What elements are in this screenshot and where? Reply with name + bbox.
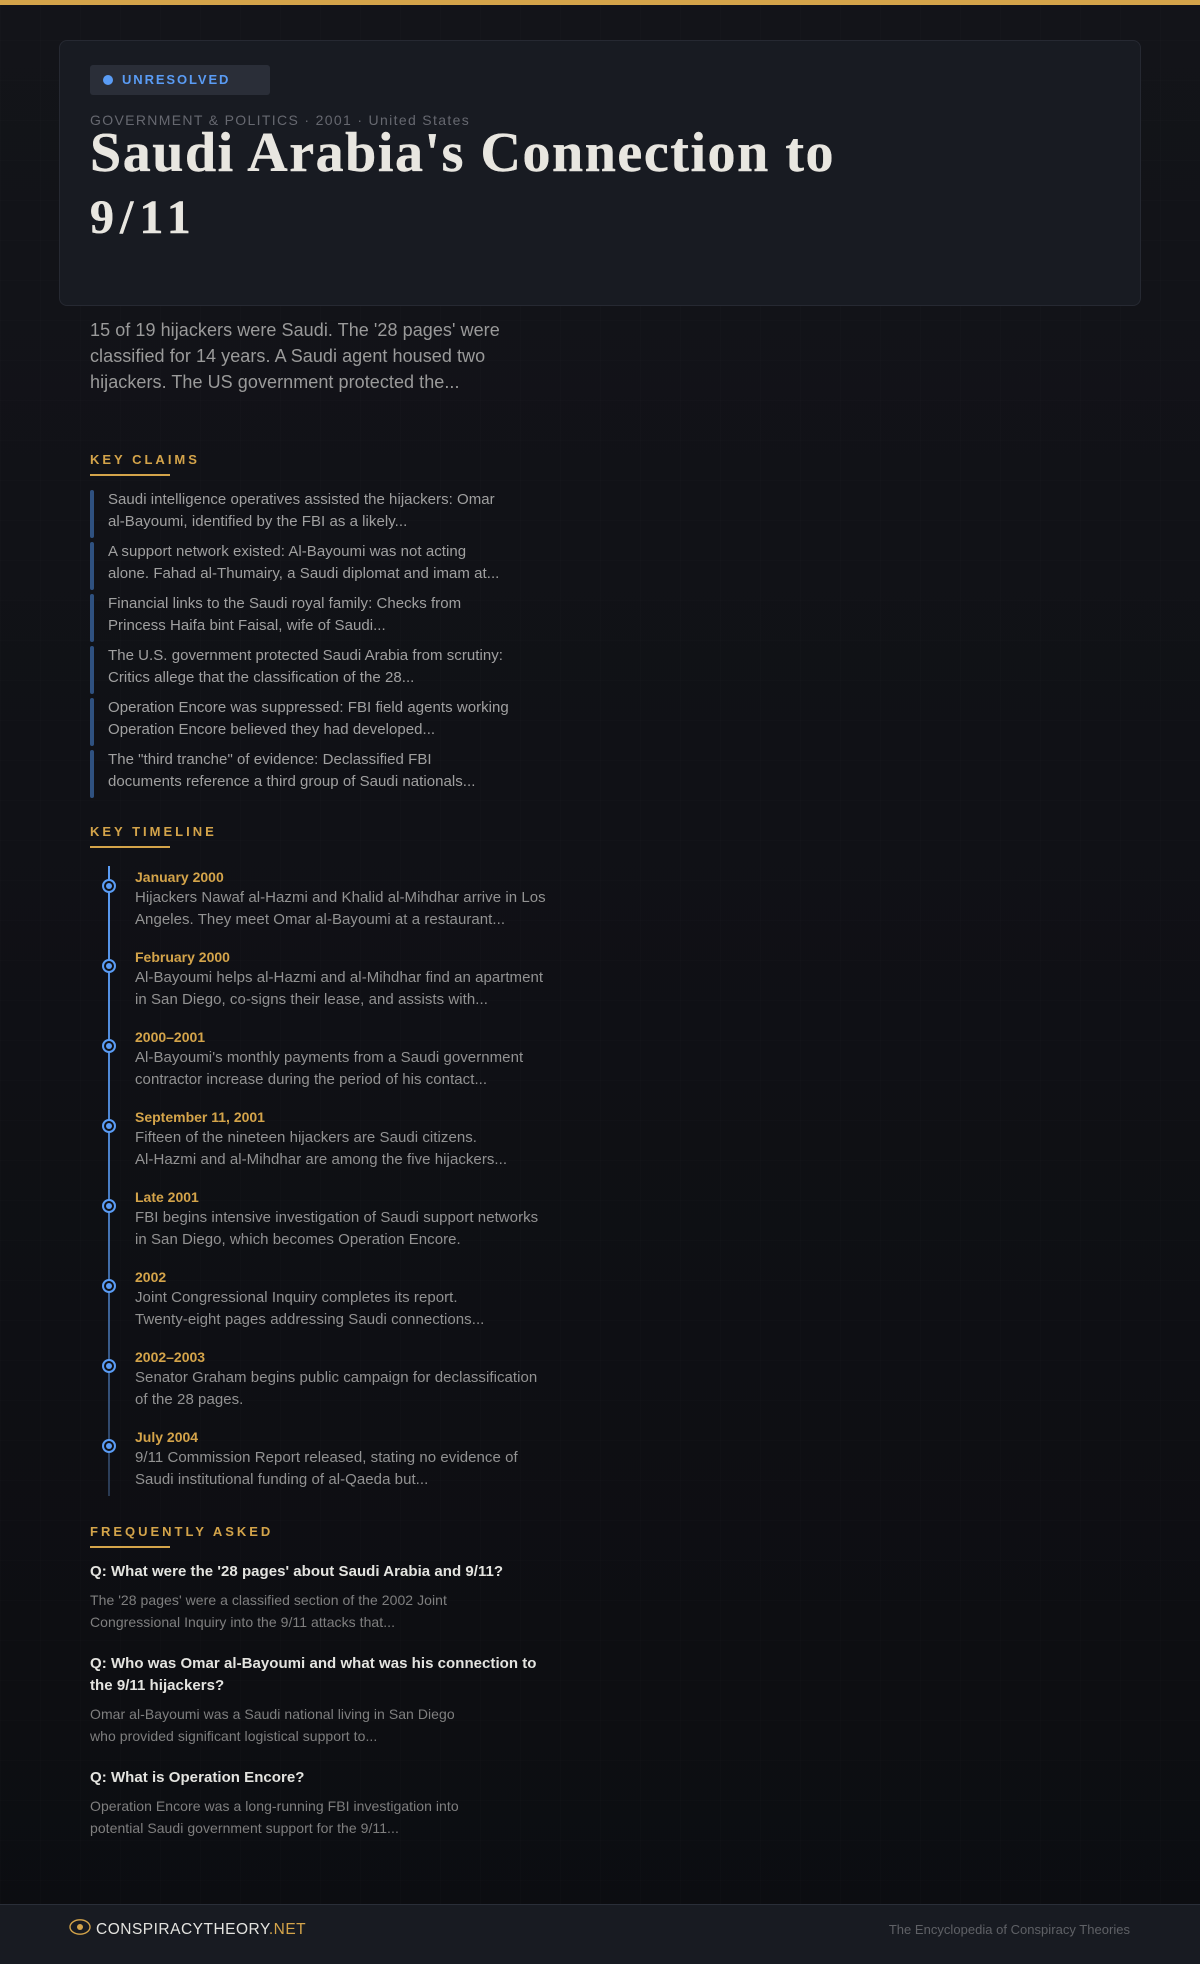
event: Late 2001	[102, 1189, 538, 1248]
answer 3: potential Saudi government support for the 9/11...	[90, 1820, 399, 1836]
summary: 15 of 19 hijackers were Saudi. The '28 pages' were	[90, 320, 500, 340]
event: July 2004: July 2004	[135, 1429, 198, 1445]
event: July 2004: 9/11 Commission Report released, stating no evidence of	[135, 1449, 518, 1466]
event: February 2000: February 2000	[135, 949, 230, 965]
answer 1: Congressional Inquiry into the 9/11 attacks that...	[90, 1614, 395, 1630]
event: 2000–2001: contractor increase during the period of his contact...	[135, 1071, 487, 1088]
panel: key claims list	[90, 490, 509, 798]
event: 2002	[102, 1269, 484, 1328]
answer 3: Operation Encore was a long-running FBI investigation into	[90, 1798, 459, 1814]
event: January 2000	[102, 869, 546, 928]
heading: frequently asked: FREQUENTLY ASKED	[90, 1524, 273, 1539]
tagline: The Encyclopedia of Conspiracy Theories	[889, 1922, 1130, 1937]
question 2	[90, 1655, 537, 1694]
event: 2002: Twenty-eight pages addressing Saudi connections...	[135, 1311, 484, 1328]
status badge	[90, 65, 270, 95]
event: July 2004	[102, 1429, 518, 1488]
top accent bar	[0, 0, 1200, 5]
event: February 2000: in San Diego, co-signs their lease, and assists with...	[135, 991, 488, 1008]
summary: hijackers. The US government protected the...	[90, 372, 460, 392]
question 2: Q: Who was Omar al-Bayoumi and what was his connection to	[90, 1655, 537, 1672]
title	[90, 122, 835, 244]
event: 2000–2001: 2000–2001	[135, 1029, 205, 1045]
event: 2002–2003	[102, 1349, 537, 1408]
title: Saudi Arabia's Connection to	[90, 122, 835, 184]
answer 1	[90, 1592, 447, 1630]
event: 2002: Joint Congressional Inquiry completes its report.	[135, 1289, 458, 1306]
event: 2002–2003: of the 28 pages.	[135, 1391, 243, 1408]
badge label: UNRESOLVED	[122, 72, 230, 87]
event: Late 2001: Late 2001	[135, 1189, 199, 1205]
answer 3	[90, 1798, 459, 1836]
claim 6: documents reference a third group of Saudi nationals...	[108, 773, 475, 790]
claim 4: The U.S. government protected Saudi Arabia from scrutiny:	[108, 647, 503, 664]
event: 2000–2001: Al-Bayoumi's monthly payments from a Saudi government	[135, 1049, 523, 1066]
answer 1: The '28 pages' were a classified section of the 2002 Joint	[90, 1592, 447, 1608]
summary	[90, 320, 500, 392]
event: July 2004: Saudi institutional funding of al-Qaeda but...	[135, 1471, 428, 1488]
brand wordmark: CONSPIRACYTHEORY.NET	[96, 1921, 306, 1938]
claim 1: Saudi intelligence operatives assisted the hijackers: Omar	[108, 491, 495, 508]
panel: timeline	[102, 869, 546, 1488]
claim 4: Critics allege that the classification of the 28...	[108, 669, 414, 686]
answer 2: who provided significant logistical support to...	[90, 1728, 377, 1744]
event: February 2000	[102, 949, 543, 1008]
event: 2002–2003: Senator Graham begins public campaign for declassification	[135, 1369, 537, 1386]
event: January 2000: January 2000	[135, 869, 224, 885]
event: September 11, 2001: Al-Hazmi and al-Mihdhar are among the five hijackers...	[135, 1151, 507, 1168]
event: January 2000: Hijackers Nawaf al-Hazmi and Khalid al-Mihdhar arrive in Los	[135, 889, 546, 906]
event: 2002: 2002	[135, 1269, 166, 1285]
footer	[0, 1904, 1200, 1964]
summary: classified for 14 years. A Saudi agent housed two	[90, 346, 485, 366]
panel: FAQ	[90, 1563, 537, 1836]
question 1: Q: What were the '28 pages' about Saudi Arabia and 9/11?	[90, 1563, 503, 1580]
claim 5: Operation Encore was suppressed: FBI field agents working	[108, 699, 509, 716]
answer 2: Omar al-Bayoumi was a Saudi national living in San Diego	[90, 1706, 455, 1722]
category metadata: GOVERNMENT & POLITICS · 2001 · United States	[90, 112, 470, 128]
event: September 11, 2001	[102, 1109, 507, 1168]
claim 2: alone. Fahad al-Thumairy, a Saudi diplomat and imam at...	[108, 565, 499, 582]
heading: key claims: KEY CLAIMS	[90, 452, 200, 467]
event: January 2000: Angeles. They meet Omar al-Bayoumi at a restaurant...	[135, 911, 505, 928]
claim 4	[90, 646, 503, 694]
event: Late 2001: in San Diego, which becomes Operation Encore.	[135, 1231, 461, 1248]
question 3: Q: What is Operation Encore?	[90, 1769, 304, 1786]
answer 2	[90, 1706, 455, 1744]
claim 6	[90, 750, 475, 798]
claim 3	[90, 594, 461, 642]
timeline axis	[108, 866, 110, 1496]
claim 1: al-Bayoumi, identified by the FBI as a likely...	[108, 513, 407, 530]
claim 2	[90, 542, 499, 590]
heading: key timeline: KEY TIMELINE	[90, 824, 217, 839]
event: February 2000: Al-Bayoumi helps al-Hazmi and al-Mihdhar find an apartment	[135, 969, 543, 986]
claim 1	[90, 490, 495, 538]
claim 6: The "third tranche" of evidence: Declassified FBI	[108, 751, 432, 768]
event: September 11, 2001: September 11, 2001	[135, 1109, 265, 1125]
event: Late 2001: FBI begins intensive investigation of Saudi support networks	[135, 1209, 538, 1226]
icon: eye logo	[69, 1919, 91, 1935]
claim 5	[90, 698, 509, 746]
claim 3: Princess Haifa bint Faisal, wife of Saudi...	[108, 617, 386, 634]
title: 9/11	[90, 191, 197, 244]
event: 2002–2003: 2002–2003	[135, 1349, 205, 1365]
event: 2000–2001	[102, 1029, 524, 1088]
claim 2: A support network existed: Al-Bayoumi was not acting	[108, 543, 466, 560]
panel: hero header	[59, 40, 1141, 306]
question 2: the 9/11 hijackers?	[90, 1677, 224, 1694]
event: September 11, 2001: Fifteen of the nineteen hijackers are Saudi citizens.	[135, 1129, 477, 1146]
claim 5: Operation Encore believed they had developed...	[108, 721, 435, 738]
icon: status dot	[103, 75, 113, 85]
claim 3: Financial links to the Saudi royal family: Checks from	[108, 595, 461, 612]
